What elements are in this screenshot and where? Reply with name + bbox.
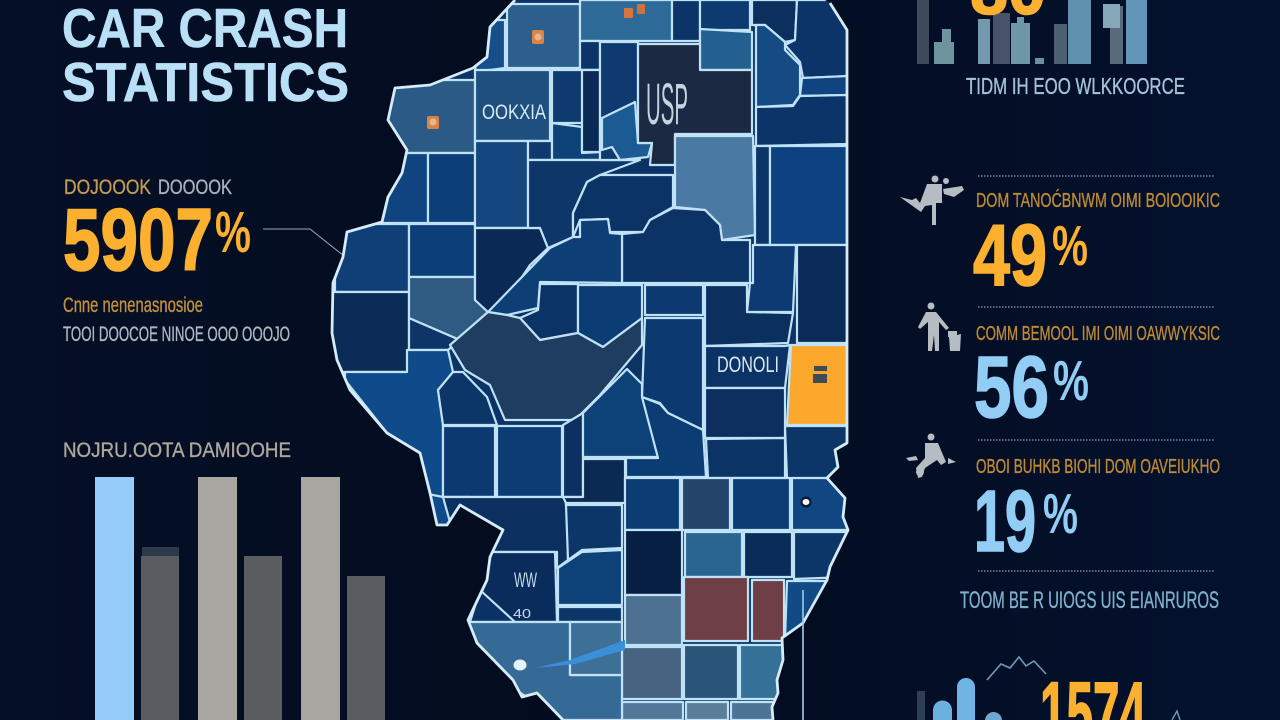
icon: highlighted orange county	[787, 345, 848, 425]
sparkline	[987, 657, 1046, 680]
title: STATISTICS	[62, 51, 349, 113]
map text: south county label: WW	[514, 569, 537, 592]
map text: small number: 40	[513, 606, 531, 621]
icon: orange marker north	[532, 30, 544, 44]
bar chart	[95, 477, 385, 720]
stat: 49 percent: 49	[973, 207, 1047, 304]
icon: white map dot south	[514, 660, 526, 670]
bar chart heading: NOJRU.OOTA DAMIOOHE	[63, 439, 291, 462]
map text: county label: OOKXIA	[482, 101, 546, 124]
icon: person with wings	[900, 176, 964, 225]
left statistic block: TOOI DOOCOE NINOE OOO OOOJO	[63, 323, 290, 346]
stat: 49 percent: %	[1052, 214, 1088, 278]
top right caption: TIDM IH EOO WLKKOORCE	[966, 73, 1185, 99]
west counties	[332, 70, 673, 372]
left statistic block: DOJOOOK	[64, 176, 151, 199]
stat: 56 percent: 56	[974, 339, 1049, 436]
east counties	[642, 0, 848, 480]
stat: 56 percent: %	[1053, 349, 1089, 413]
left statistic block: DOOOOK	[158, 176, 232, 199]
central dark region	[450, 312, 642, 420]
bottom right mini chart	[917, 657, 1046, 720]
icon: orange markers top	[624, 4, 645, 18]
left statistic block: 5907	[63, 190, 213, 289]
top right bar chart	[917, 0, 1147, 64]
southern counties	[460, 478, 848, 720]
icon: orange marker west	[427, 116, 439, 129]
callout line south	[802, 590, 804, 720]
icon: white map dot east	[800, 496, 812, 508]
map text: east county label: DONOLI	[717, 352, 779, 377]
map of counties	[332, 0, 848, 720]
southwest counties	[345, 350, 706, 622]
map of counties: USP	[646, 72, 688, 137]
icon: symbol on orange county	[813, 366, 827, 383]
callout line	[263, 229, 344, 256]
left statistic block	[63, 176, 290, 346]
icon: person with child	[918, 302, 961, 351]
brown counties	[684, 577, 784, 641]
stat: 19 percent: 19	[974, 473, 1036, 570]
dotted dividers	[978, 176, 1215, 571]
north central counties	[488, 42, 755, 347]
top counties	[475, 0, 797, 72]
left statistic block: Cnne nenenasnosioe	[63, 294, 203, 317]
stat: 19 percent	[906, 434, 1220, 570]
left statistic block: %	[215, 200, 251, 265]
map outline	[332, 0, 848, 720]
blue road streak	[535, 640, 625, 668]
stat: 49 percent	[900, 176, 1220, 304]
stat: 19 percent: %	[1043, 482, 1078, 546]
stat: 56 percent	[918, 302, 1220, 436]
title	[62, 0, 349, 113]
icon: running person	[906, 434, 956, 478]
small peak mark	[1172, 711, 1180, 720]
